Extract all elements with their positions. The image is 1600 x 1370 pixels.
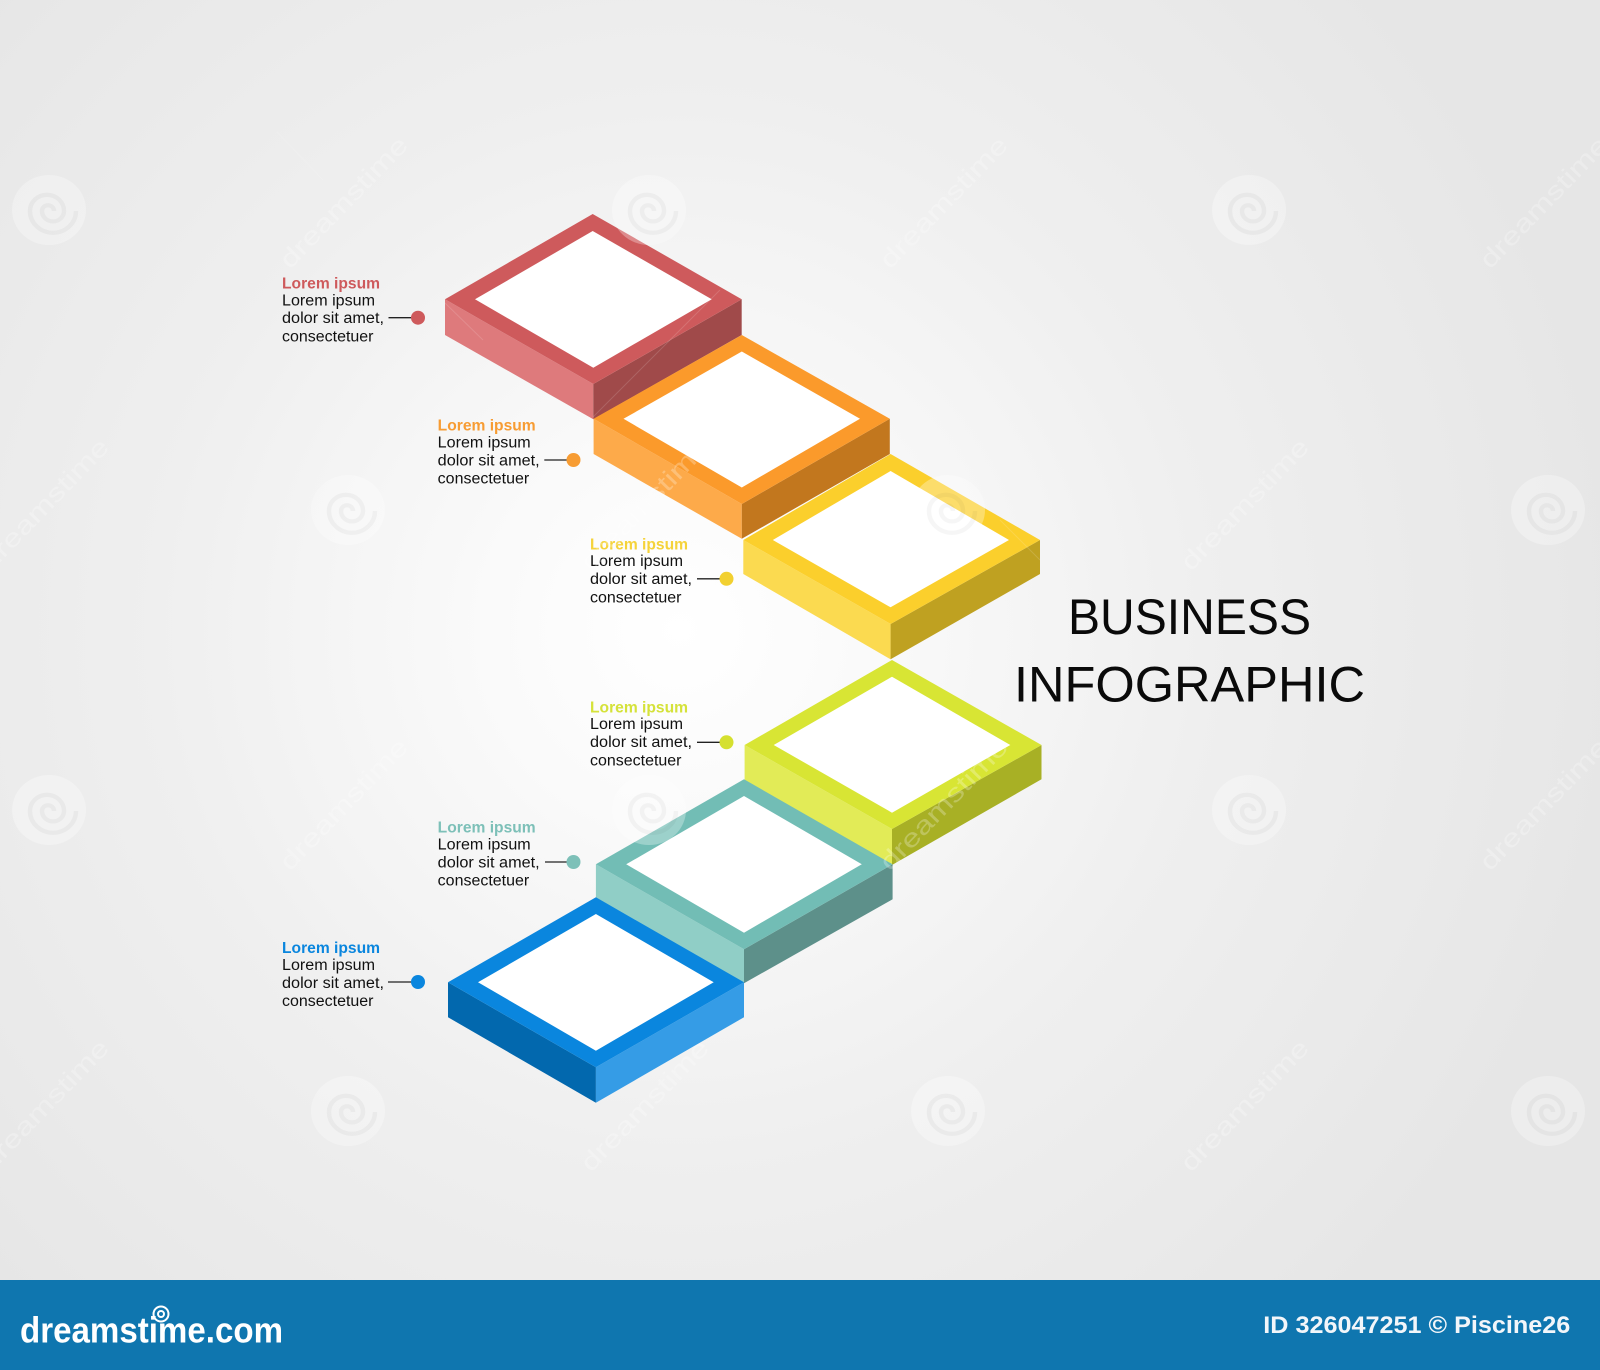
label 1: red: Lorem ipsum [282,276,380,292]
step 4: lime block [745,660,1042,865]
teal left face [596,864,744,983]
label 5: teal: consectetuer [438,872,529,889]
label 4: lime [590,700,734,769]
lime left face [745,745,892,865]
step 3: yellow block [743,454,1040,659]
label 6: blue: consectetuer [282,993,374,1010]
label 4: lime: Lorem ipsum [590,700,688,716]
label 6: blue [282,940,425,1010]
footer bar [0,1280,1600,1370]
lime top frame [745,660,1042,829]
label 3: yellow: Lorem ipsum [590,553,683,570]
teal top frame [596,779,893,949]
orange left face [594,419,742,539]
orange top frame [594,335,890,504]
step 6: blue block [448,897,744,1103]
label 6: blue: Lorem ipsum [282,957,375,974]
label 4: lime: consectetuer [590,752,682,769]
title: INFOGRAPHIC [1014,657,1365,713]
blue top frame [448,897,744,1067]
lime white panel [774,677,1010,813]
red right face [593,299,742,419]
title: BUSINESS [1068,589,1311,645]
label 5: teal: Lorem ipsum [438,820,536,837]
red white panel [475,231,712,368]
orange right face [742,419,890,539]
label 1: red: Lorem ipsum [282,292,375,310]
lime right face [892,745,1042,865]
yellow right face [891,540,1040,659]
stock-photo watermark overlay: dreamstime [575,1034,715,1177]
label 2: orange [438,418,580,488]
label 5: teal [438,820,580,889]
label 2: orange: dolor sit amet, [438,452,540,469]
red left face [445,299,593,419]
footer image id and credit: ID 326047251 © Piscine26 [1263,1312,1570,1339]
label 2: orange: Lorem ipsum [438,434,531,452]
label 3: yellow: Lorem ipsum [590,536,688,554]
stock-photo watermark overlay: dreamstime [274,131,414,274]
blue white panel [478,914,714,1051]
label 1: red [282,276,425,346]
label 5: teal: dolor sit amet, [438,854,540,871]
stock-photo watermark overlay: dreamstime [1474,733,1600,876]
stock-photo watermark overlay: dreamstime [874,131,1014,274]
label 6: blue: dolor sit amet, [282,975,384,992]
stock-photo watermark overlay [0,131,1600,1177]
footer logo wordmark: dreamstime.com [20,1310,283,1351]
teal white panel [626,796,862,933]
stock-photo watermark overlay: dreamstime [1474,131,1600,274]
stock-photo watermark overlay: dreamstime [274,733,414,876]
label 4: lime: Lorem ipsum [590,716,683,733]
stock-photo watermark overlay: dreamstime [1175,433,1315,576]
title [1014,589,1365,713]
label 2: orange: Lorem ipsum [438,418,536,435]
label 4: lime: dolor sit amet, [590,734,692,751]
stock-photo watermark overlay: dreamstime [575,433,715,576]
step 2: orange block [594,335,890,539]
yellow white panel [773,471,1009,607]
label 1: red: consectetuer [282,328,374,346]
blue right face [596,982,744,1103]
label 3: yellow: dolor sit amet, [590,571,692,588]
label 6: blue: Lorem ipsum [282,940,380,957]
yellow top frame [743,454,1040,624]
footer logo spiral [154,1306,168,1322]
teal right face [744,864,893,983]
label 1: red: dolor sit amet, [282,310,384,327]
yellow left face [743,540,891,659]
step 5: teal block [596,779,893,983]
label 2: orange: consectetuer [438,471,529,488]
label 5: teal: Lorem ipsum [438,836,531,853]
stock-photo watermark overlay: dreamstime [1175,1034,1315,1177]
orange white panel [624,352,860,488]
label 3: yellow [590,536,734,606]
step 1: red block [445,214,742,419]
blue left face [448,982,596,1103]
red top frame [445,214,742,384]
stock-photo watermark overlay: dreamstime [874,733,1014,876]
label 3: yellow: consectetuer [590,589,682,606]
